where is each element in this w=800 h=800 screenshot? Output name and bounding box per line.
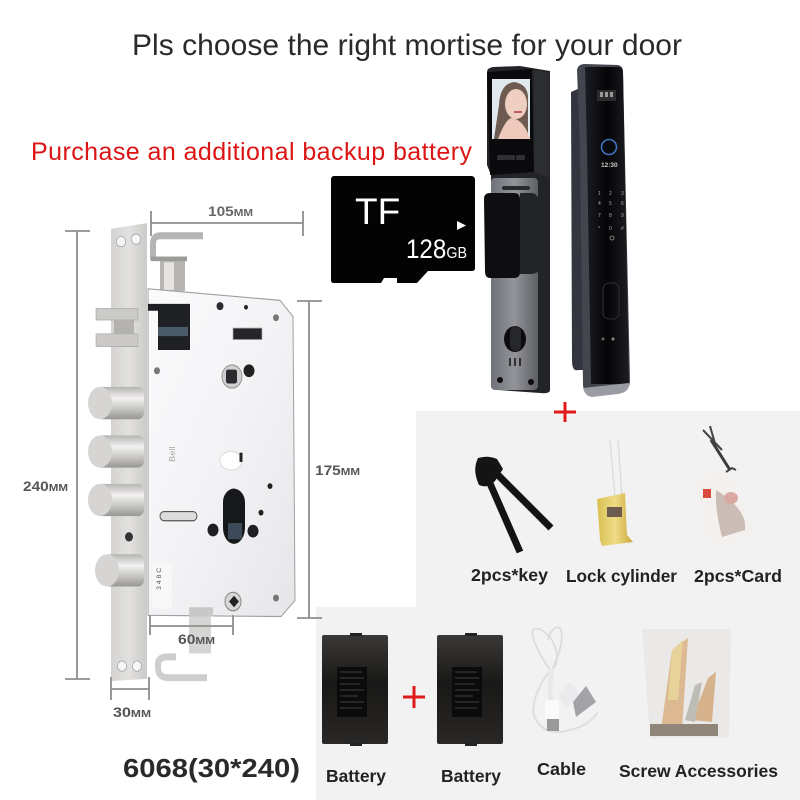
model label: 6068(30*240): [123, 753, 300, 783]
label: Screw Accessories: Screw Accessories: [619, 761, 778, 781]
keypad: 8: [609, 213, 612, 219]
dimension: 60mm: 60MM: [178, 631, 215, 647]
60mm lug: [189, 607, 213, 617]
icon: TF memory card: 128GB: [406, 234, 467, 264]
red notice: backup battery: Purchase an additional backup battery: [31, 138, 472, 166]
label: 2pcs*key: 2pcs*key: [471, 565, 548, 585]
keypad: #: [621, 226, 624, 232]
case details: 3 4 8 C: [156, 567, 163, 590]
dimension: 240mm: 240MM: [23, 478, 68, 494]
smart lock: side with fingerprint sensor and keypad: [571, 64, 630, 397]
icon: access card with fob: [693, 426, 756, 547]
keypad: 1: [598, 191, 601, 197]
faceplate: [111, 223, 147, 681]
icon: lock cylinder: [597, 440, 633, 546]
case details: Bell: [168, 446, 177, 462]
bottom hook latch: [158, 610, 211, 678]
keyhole: [504, 326, 526, 352]
dimension: 30mm: 30MM: [113, 704, 151, 720]
icon: battery left: [322, 633, 388, 746]
icon: screw accessories bag: [642, 629, 731, 738]
label: Battery left: Battery: [326, 766, 386, 786]
keypad: 3: [621, 191, 624, 197]
plus sign under lock: [554, 402, 576, 422]
fingerprint ring: [602, 140, 616, 154]
round bolts: [88, 387, 144, 587]
label: 2pcs*Card: 2pcs*Card: [694, 566, 782, 586]
dimension: 60mm: [150, 615, 233, 647]
icon: USB cable: [533, 628, 598, 732]
keypad: 6: [621, 201, 624, 207]
icon: battery right: [437, 633, 503, 746]
panel: included accessories: [316, 411, 800, 800]
mortise lock: [88, 223, 295, 681]
lock case: [148, 289, 295, 617]
label: Lock cylinder: Lock cylinder: [566, 566, 677, 586]
icon: keys: [475, 457, 551, 552]
smart lock: front with screen and handle: [484, 66, 550, 393]
top hook latch: [151, 236, 203, 291]
clock display: 12:30: [601, 162, 618, 169]
keypad: 0: [609, 226, 612, 232]
icon: TF memory card: TF: [355, 191, 400, 232]
icon: TF memory card: [331, 176, 475, 283]
dimension: 175mm: 175MM: [315, 462, 360, 478]
keypad: 5: [609, 201, 612, 207]
dimension: 240mm: [23, 231, 90, 679]
red plus between batteries: [403, 686, 425, 708]
title: Pls choose the right mortise for your door: [132, 29, 682, 62]
dimension: 105mm: 105MM: [208, 203, 253, 219]
dimension: 175mm: [297, 301, 360, 618]
case details: [148, 302, 279, 611]
keypad: [598, 191, 624, 232]
label: Cable: Cable: [537, 759, 586, 779]
door handle: [484, 193, 539, 278]
dimension: 105mm: [151, 203, 303, 236]
keypad: 9: [621, 213, 624, 219]
dimension: 30mm: [111, 677, 151, 720]
deadlatch: [96, 308, 138, 347]
keypad: 4: [598, 201, 601, 207]
face photo screen: [492, 79, 530, 139]
keypad: 7: [598, 213, 601, 219]
label: Battery right: Battery: [441, 766, 501, 786]
keypad: *: [598, 226, 600, 232]
keypad: 2: [609, 191, 612, 197]
